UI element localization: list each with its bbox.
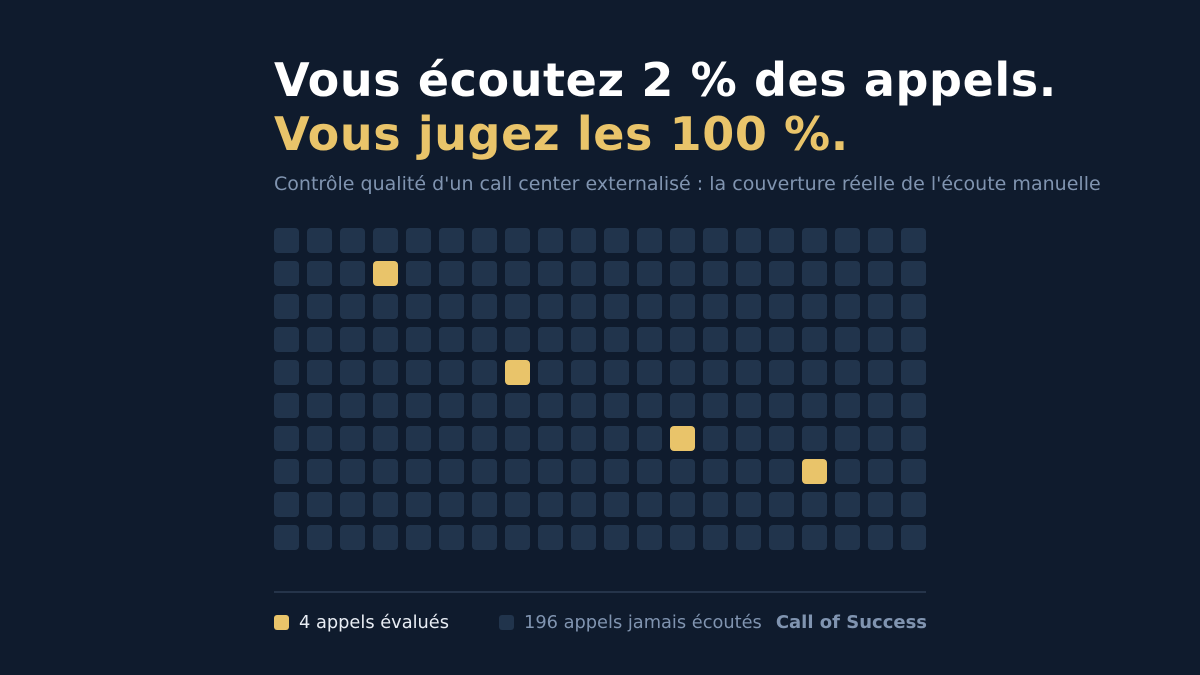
title	[274, 53, 1057, 160]
subtitle: Contrôle qualité d'un call center externalisé : la couverture réelle de l'écoute manuelle	[274, 172, 1101, 194]
legend swatch: evaluated	[274, 615, 289, 630]
title line 1: Vous écoutez 2 % des appels.	[274, 53, 1057, 107]
highlighted evaluated calls	[373, 261, 827, 484]
title line 2: Vous jugez les 100 %.	[274, 106, 849, 160]
legend label: never listened: 196 appels jamais écoutés	[524, 612, 762, 633]
legend label: evaluated: 4 appels évalués	[299, 612, 449, 633]
legend swatch: never listened	[499, 615, 514, 630]
brand credit: Call of Success	[776, 612, 927, 633]
